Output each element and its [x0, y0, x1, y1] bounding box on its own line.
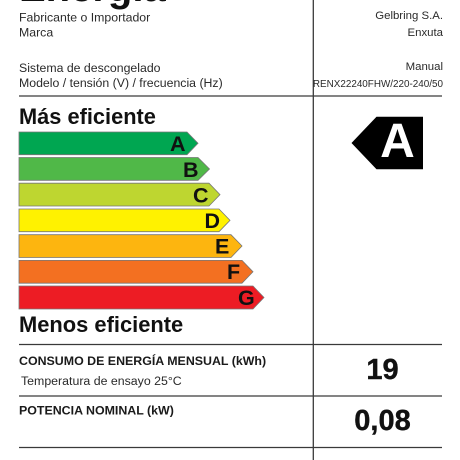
heading: most efficient: Más eficiente: [19, 104, 156, 129]
bar E: E: [215, 234, 229, 258]
bar C: C: [193, 184, 209, 208]
bar A: [19, 132, 198, 156]
bar A: A: [170, 132, 186, 156]
value: 19: 19: [366, 354, 399, 386]
bar D: D: [204, 209, 220, 233]
bar B: B: [183, 158, 199, 182]
value: 0,08: 0,08: [354, 405, 411, 437]
efficiency scale: [19, 132, 264, 310]
product field labels: Marca: [19, 26, 53, 40]
product field values: RENX22240FHW/220-240/50: [313, 79, 444, 90]
rating arrow: A: A: [380, 115, 415, 168]
monthly energy consumption: [19, 353, 399, 388]
bar F: [19, 260, 253, 284]
bar D: [19, 209, 230, 233]
product field values: Manual: [406, 61, 443, 73]
monthly energy consumption: Temperatura de ensayo 25°C: [21, 374, 182, 388]
nominal power: POTENCIA NOMINAL (kW): [19, 404, 174, 418]
product field values: [313, 10, 444, 90]
product field labels: Modelo / tensión (V) / frecuencia (Hz): [19, 76, 223, 90]
bar G: [19, 286, 264, 310]
product field labels: [19, 10, 223, 90]
bar C: [19, 183, 220, 208]
product field labels: Fabricante o Importador: [19, 10, 150, 24]
product field labels: Sistema de descongelado: [19, 61, 161, 75]
bar F: F: [227, 260, 240, 284]
rating arrow: A: [352, 115, 423, 169]
bar B: [19, 158, 210, 182]
product field values: Gelbring S.A.: [375, 10, 443, 22]
bar G: G: [238, 286, 255, 310]
nominal power: [19, 404, 411, 437]
heading: least efficient: Menos eficiente: [19, 312, 183, 337]
bar E: [19, 234, 242, 258]
product field values: Enxuta: [408, 27, 444, 39]
monthly energy consumption: CONSUMO DE ENERGÍA MENSUAL (kWh): [19, 353, 266, 368]
